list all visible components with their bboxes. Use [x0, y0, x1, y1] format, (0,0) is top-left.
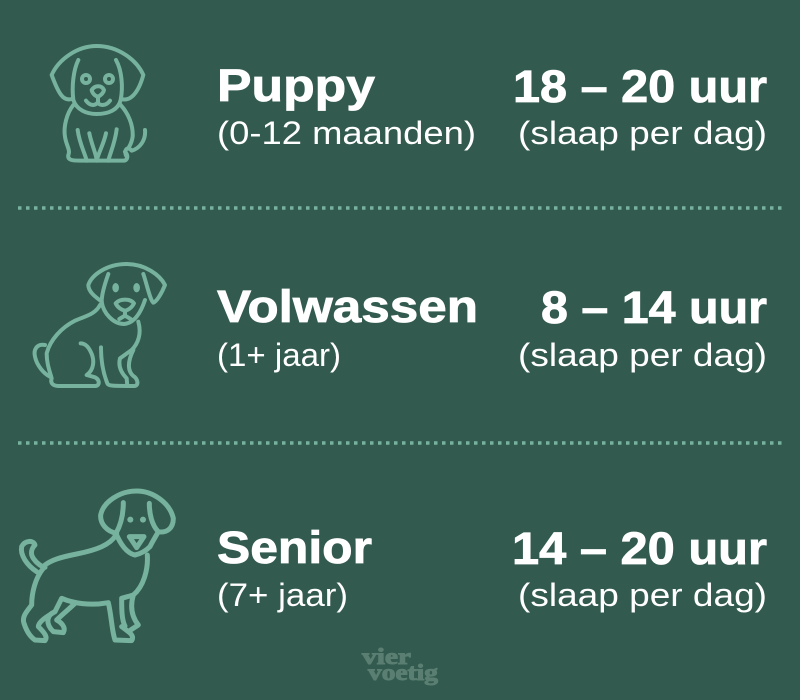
- text: sleep per day senior: (slaap per dag): [518, 577, 767, 613]
- stat: puppy hours: 18 – 20 uur: [513, 61, 767, 112]
- icon: puppy: [52, 46, 145, 161]
- text: age senior: (7+ jaar): [217, 577, 348, 613]
- text: sleep per day adult: (slaap per dag): [518, 337, 767, 373]
- text: age adult: (1+ jaar): [217, 337, 341, 373]
- text: age puppy: (0-12 maanden): [217, 115, 476, 151]
- logo: vier voetig: [362, 644, 439, 685]
- icon: senior dog: [21, 491, 173, 641]
- icon: adult dog: [35, 264, 165, 386]
- logo: vier voetig: vier: [362, 644, 411, 669]
- stat: senior hours: 14 – 20 uur: [512, 523, 767, 574]
- heading: Senior: Senior: [217, 522, 372, 573]
- heading: Volwassen: Volwassen: [217, 281, 478, 332]
- heading: Puppy: Puppy: [217, 60, 375, 111]
- text: sleep per day puppy: (slaap per dag): [518, 115, 767, 151]
- logo: vier voetig: voetig: [368, 660, 439, 685]
- stat: adult hours: 8 – 14 uur: [541, 282, 767, 333]
